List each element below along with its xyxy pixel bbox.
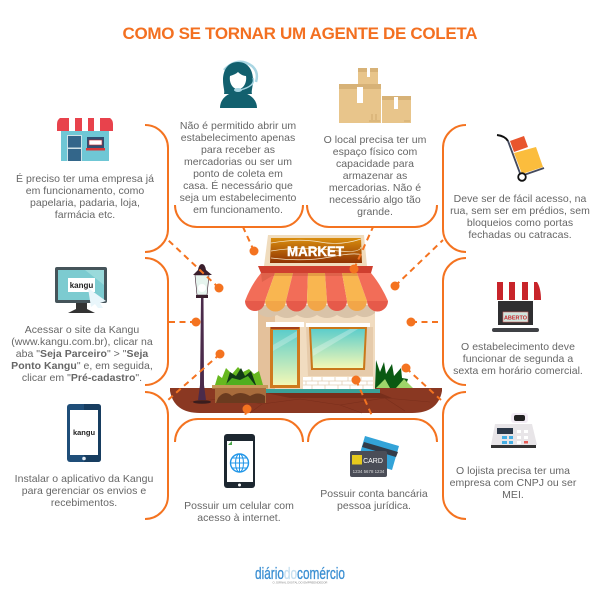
icon: open shop sign: ABERTO (504, 316, 528, 322)
text: para gerenciar os envios e (22, 485, 146, 497)
text (450, 465, 577, 501)
text: Deve ser de fácil acesso, na (454, 193, 586, 205)
text: É preciso ter uma empresa já (16, 172, 154, 185)
icon: shop (57, 118, 113, 161)
text: estabelecimento apenas (181, 132, 295, 144)
text (184, 500, 294, 524)
text: sexta em horário comercial. (453, 365, 583, 377)
text: Possuir um celular com (184, 500, 294, 512)
title: COMO SE TORNAR UM AGENTE DE COLETA (122, 24, 478, 43)
bracket (308, 419, 437, 442)
bracket (145, 125, 168, 252)
text: Não é permitido abrir um (180, 120, 296, 132)
planter and bush (212, 367, 268, 403)
text: papelaria, padaria, loja, (30, 197, 140, 209)
bracket (175, 205, 303, 227)
window (306, 323, 370, 370)
panel: CNPJ (443, 392, 577, 519)
panel: horário comercial (443, 258, 583, 385)
building (258, 305, 375, 389)
text: Instalar o aplicativo da Kangu (15, 473, 153, 485)
bracket (443, 392, 466, 519)
text: MEI. (502, 489, 524, 501)
text: O lojista precisa ter uma (456, 465, 570, 477)
text: em funcionamento, como (26, 185, 144, 197)
text: clicar em "Pré-cadastro". (22, 372, 142, 384)
text: fechadas ou catracas. (468, 229, 572, 241)
text (324, 134, 427, 218)
text: acesso à internet. (197, 512, 281, 524)
text: farmácia etc. (55, 209, 115, 221)
text: rua, sem ser em prédios, sem (450, 205, 590, 217)
panel: aplicativo (15, 392, 168, 519)
panel: celular (175, 419, 303, 524)
text (450, 193, 590, 241)
text (453, 341, 583, 377)
bracket (145, 392, 168, 519)
panel: conta bancária (308, 419, 437, 512)
bracket (443, 258, 466, 385)
bracket (307, 205, 437, 227)
text: pessoa jurídica. (337, 500, 411, 512)
text: em funcionamento. (193, 204, 283, 216)
text: ponto de coleta em (193, 168, 283, 180)
icon: cash register (491, 413, 537, 448)
text (180, 120, 297, 216)
icon: cardboard boxes (339, 68, 411, 123)
illustration: market storefront (170, 235, 442, 413)
icon: bank cards (350, 436, 399, 477)
text: capacidade para (336, 158, 414, 170)
sign: market (264, 235, 367, 266)
text: bloqueios como portas (467, 217, 573, 229)
icon: monitor (55, 267, 107, 313)
text (320, 488, 428, 512)
text: (www.kangu.com.br), clicar na (11, 336, 153, 348)
text: O estabelecimento deve (461, 341, 575, 353)
text: casa. É necessário que (183, 179, 293, 192)
awning (245, 266, 388, 312)
icon: monitor: kangu (70, 281, 93, 290)
icon: bank cards: CARD (363, 458, 383, 465)
connector lines and dots (168, 227, 443, 419)
text: funcionar de segunda a (463, 353, 573, 365)
panel: site da Kangu (11, 258, 168, 385)
text (15, 473, 153, 509)
text: aba "Seja Parceiro" > "Seja (16, 348, 148, 360)
panel: espaço físico (307, 68, 437, 227)
text: armazenar as (343, 170, 407, 182)
icon: agent with headset (220, 62, 257, 108)
text: Possuir conta bancária (320, 488, 428, 500)
text: Acessar o site da Kangu (25, 324, 139, 336)
icon: bank cards: 1234 5678 1234 (353, 469, 385, 474)
text (16, 172, 154, 221)
panel: estabelecimento (175, 62, 303, 227)
logo: diário do comércio: diáriodocomércio (255, 565, 345, 583)
sign: market: MARKET (287, 244, 345, 259)
text: mercadorias. Não é (329, 182, 421, 194)
icon: hand truck (497, 135, 544, 181)
text: espaço físico com (333, 146, 417, 158)
bracket (145, 258, 168, 385)
text: Ponto Kangu" e, em seguida, (11, 360, 153, 372)
text: mercadorias ou ser um (184, 156, 292, 168)
panel: empresa em funcionamento (16, 118, 168, 252)
text: O local precisa ter um (324, 134, 427, 146)
ground (170, 388, 442, 413)
lamp post (193, 264, 212, 404)
icon: phone with Kangu app: kangu (73, 428, 95, 437)
panel: fácil acesso (443, 125, 590, 252)
plants right (375, 360, 413, 388)
logo: diário do comércio: O JORNAL DIGITAL DO EMPREENDEDOR (273, 580, 327, 584)
text: necessário algo tão (329, 194, 421, 206)
bracket (175, 419, 303, 442)
text (11, 324, 153, 384)
text: recebimentos. (51, 497, 117, 509)
text: empresa com CNPJ ou ser (450, 477, 577, 489)
text: grande. (357, 206, 393, 218)
icon: smartphone with globe (224, 434, 255, 488)
door (266, 322, 304, 388)
text: seja um estabelecimento (180, 192, 297, 204)
text: para receber as (201, 144, 275, 156)
bracket (443, 125, 466, 252)
bricks (303, 377, 373, 389)
icon: phone with Kangu app (67, 404, 101, 462)
